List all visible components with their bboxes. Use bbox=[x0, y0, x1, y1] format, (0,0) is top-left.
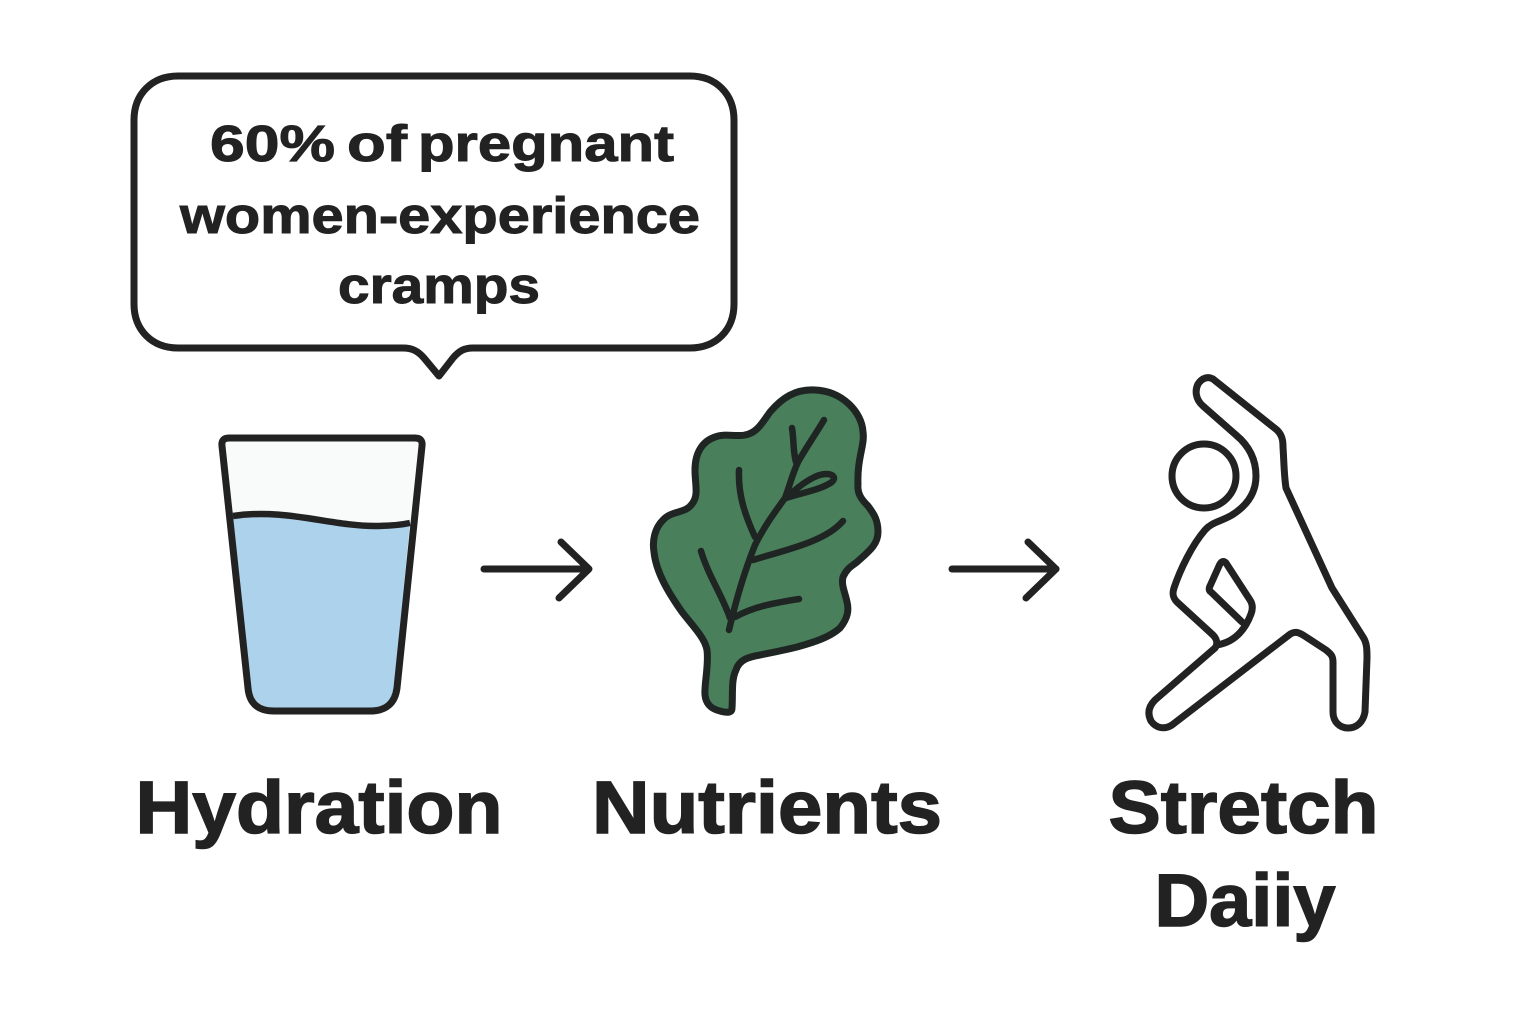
callout: speech bubble: of bbox=[347, 115, 408, 172]
icon: leaf bbox=[653, 390, 878, 712]
arrow: nutrients to stretch bbox=[952, 542, 1056, 598]
icon: glass of water bbox=[222, 438, 422, 711]
label: Hydration: Hydration bbox=[136, 766, 502, 849]
callout: speech bubble: 60% bbox=[210, 115, 335, 172]
arrow: hydration to nutrients bbox=[484, 542, 589, 598]
label: Nutrients: Nutrients bbox=[592, 766, 942, 849]
label: Stretch Daily: Stretch bbox=[1108, 766, 1378, 849]
callout: speech bubble: women-experience bbox=[179, 187, 700, 244]
callout: speech bubble bbox=[134, 76, 734, 376]
callout: speech bubble: pregnant bbox=[418, 115, 674, 172]
icon: stretching figure bbox=[1149, 378, 1367, 728]
label: Stretch Daily bbox=[1108, 766, 1378, 942]
label: Stretch Daily: Daiiy bbox=[1154, 859, 1336, 942]
callout: speech bubble: cramps bbox=[338, 257, 540, 314]
